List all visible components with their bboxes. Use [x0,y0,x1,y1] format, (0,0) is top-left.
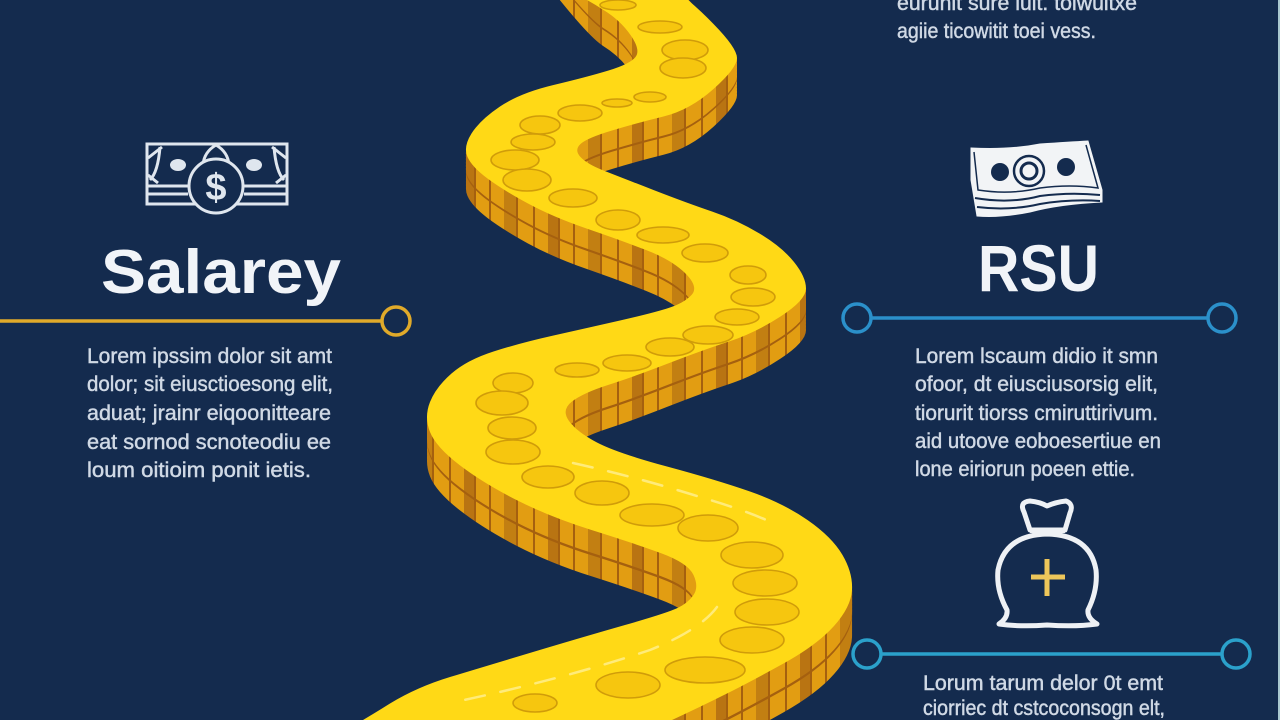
RSU body text: aid utoove eoboesertiue en [915,430,1161,453]
dashed road markings [450,463,773,703]
RSU body text: tiorurit tiorss cmiruttirivum. [915,402,1158,425]
RSU body text: lone eiriorun poeen ettie. [915,458,1135,481]
bag body text: Lorum tarum delor 0t emt [923,672,1163,695]
salary body text: eat sornod scnoteodiu ee [87,431,331,454]
panel: bonus bag [853,501,1250,720]
panel: salary [0,144,410,482]
salary body text [87,345,333,482]
RSU body text: ofoor, dt eiusciusorsig elit, [915,373,1158,396]
salary body text: aduat; jrainr eiqoonitteare [87,402,331,425]
road side wall [427,0,852,720]
heading: RSU: RSU [978,231,1099,305]
right edge strip [1278,0,1280,720]
salary body text: dolor; sit eiusctioesong elit, [87,373,333,396]
RSU body text: Lorem lscaum didio it smn [915,345,1158,368]
icon: banknote with dollar coin [147,144,287,213]
road top surface [340,0,870,720]
teal connector line [853,640,1250,668]
blue connector line [843,304,1236,332]
heading: Salarey: Salarey [101,238,342,307]
salary body text: loum oitioim ponit ietis. [87,459,311,482]
icon: stack of bills [971,141,1102,216]
icon: banknote with dollar coin: $ [205,167,227,209]
RSU body text [915,345,1161,481]
panel: top right text fragment [897,0,1137,43]
gold connector line [0,307,410,335]
coins on the road [476,0,799,712]
central gold coin road [340,0,870,720]
icon: money bag with plus [998,501,1097,626]
salary body text: Lorem ipssim dolor sit amt [87,345,332,368]
bag body text: ciorriec dt cstcoconsogn elt, [923,697,1165,720]
panel: RSU [843,141,1236,481]
panel: top right text fragment: agiie ticowitit toei vess. [897,20,1096,43]
bag body text [923,672,1165,720]
